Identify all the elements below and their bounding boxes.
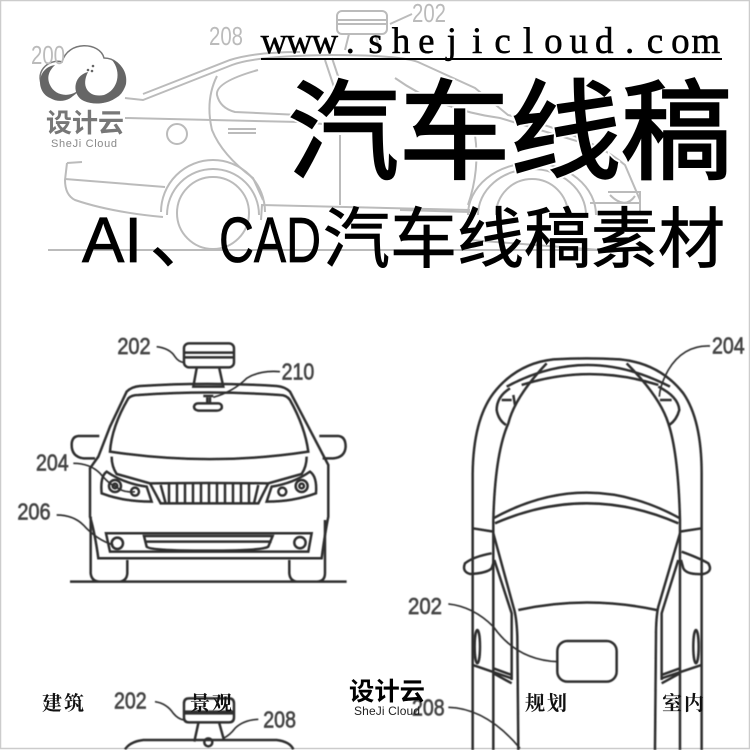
body shell bbox=[90, 384, 328, 558]
leader lines bbox=[57, 347, 280, 545]
bottom logo text: 设计云 bbox=[349, 678, 425, 706]
number labels: 204 bbox=[712, 332, 745, 358]
logo subtext: SheJi Cloud bbox=[51, 138, 117, 150]
grille bbox=[150, 483, 268, 503]
number labels: 206 bbox=[17, 498, 51, 524]
roof sensor bbox=[557, 641, 617, 682]
pillars and roof bbox=[493, 533, 680, 750]
subtitle bbox=[82, 202, 725, 276]
hood and windshield bbox=[493, 363, 680, 750]
number labels: 208 bbox=[263, 707, 296, 733]
background roof sensor bbox=[337, 11, 412, 50]
windshield bbox=[110, 392, 308, 459]
number labels: 202 bbox=[408, 593, 442, 619]
logo text: 设计云 bbox=[46, 108, 124, 138]
label: 规划: 规划 bbox=[525, 687, 569, 716]
background side-view car line drawing bbox=[48, 52, 640, 250]
leader lines bbox=[155, 702, 258, 738]
small number labels on background car bbox=[31, 0, 446, 70]
lower bumper and fog lamps bbox=[106, 533, 312, 552]
title weight layer: 汽车线稿 bbox=[288, 72, 732, 193]
top view car diagram bbox=[408, 332, 745, 750]
number labels: 208 bbox=[412, 694, 445, 720]
number labels bbox=[114, 687, 296, 733]
number labels: 202 bbox=[117, 333, 151, 359]
bottom logo subtext: SheJi Cloud bbox=[354, 704, 420, 718]
rear view mirror bbox=[194, 396, 222, 411]
wheels and ground bbox=[70, 517, 347, 582]
outer body bbox=[473, 358, 702, 750]
website url: www.shejicloud.com bbox=[261, 21, 720, 62]
roof sensor bbox=[184, 698, 234, 722]
label: 建筑: 建筑 bbox=[42, 687, 86, 716]
subtitle: AI bbox=[82, 204, 142, 276]
b-pillar lines bbox=[473, 665, 702, 683]
mirrors bbox=[72, 436, 346, 458]
leader lines bbox=[448, 346, 710, 748]
subtitle: 汽车线稿素材 bbox=[323, 202, 725, 276]
number labels bbox=[17, 333, 314, 524]
label: 室内: 室内 bbox=[662, 687, 706, 716]
front view car diagram bbox=[17, 333, 347, 582]
small number labels on background car: 200 bbox=[31, 40, 65, 70]
icon: cloud bbox=[40, 46, 126, 104]
label: 景观: 景观 bbox=[190, 687, 234, 716]
bottom partial front view car bbox=[114, 687, 296, 749]
hood lines bbox=[112, 457, 307, 483]
number labels: 210 bbox=[282, 358, 314, 384]
roof sensor bbox=[184, 343, 234, 387]
sensor base and roof bbox=[125, 723, 293, 749]
subtitle: 、 bbox=[150, 202, 216, 276]
headlights bbox=[497, 387, 679, 425]
title: 汽车线稿 bbox=[288, 72, 732, 193]
side mirrors bbox=[464, 528, 710, 574]
headlights bbox=[101, 472, 316, 502]
small number labels on background car: 208 bbox=[209, 21, 243, 51]
bottom navigation labels bbox=[42, 678, 706, 718]
number labels: 204 bbox=[36, 450, 69, 476]
logo: 设计云 cloud mark bbox=[40, 46, 126, 150]
subtitle: CAD bbox=[219, 204, 321, 276]
number labels: 202 bbox=[114, 687, 147, 713]
door handles bbox=[475, 630, 699, 663]
number labels bbox=[408, 332, 745, 720]
